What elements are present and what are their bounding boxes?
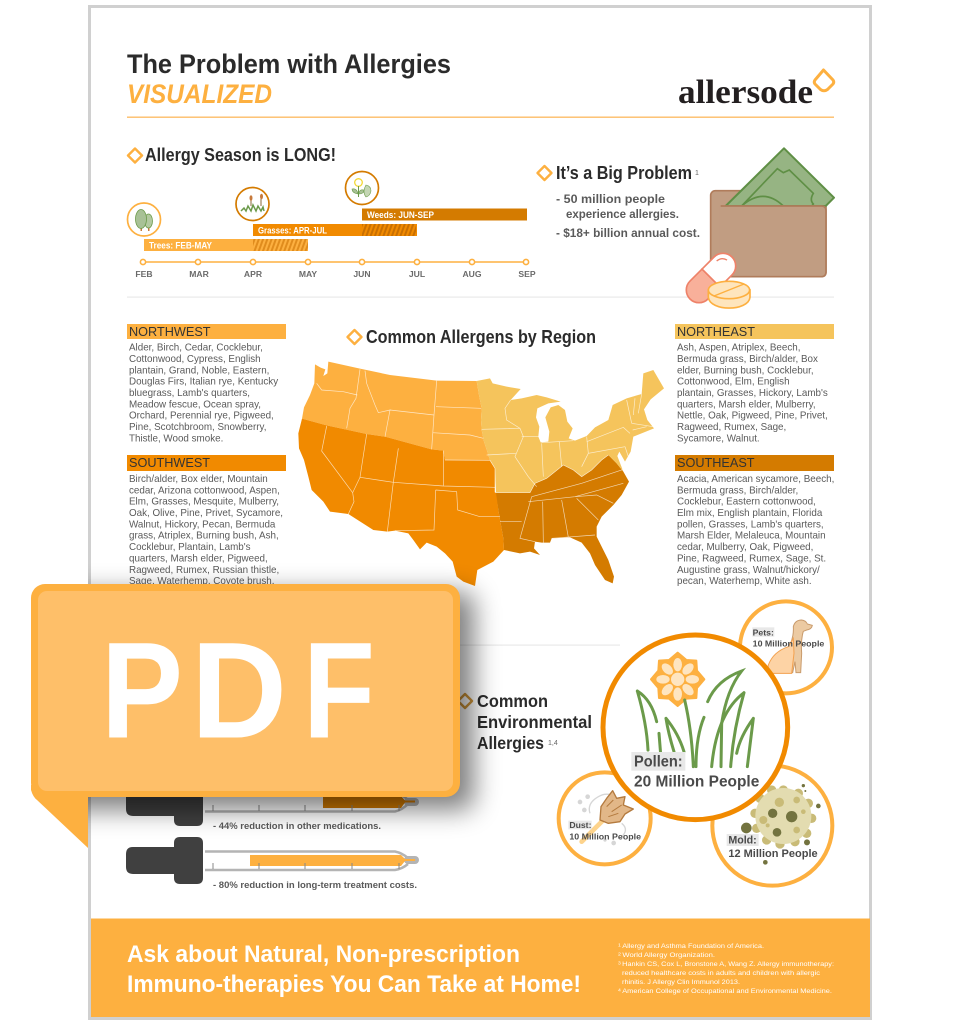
- text: problem stats: - $18+ billion annual cost.: [556, 227, 700, 240]
- state borders: [317, 369, 653, 543]
- heading: It's a Big Problem: 1: [695, 170, 699, 177]
- footer references: Hankin CS, Cox L, Bronstone A, Wang Z. Allergy immunotherapy:: [622, 961, 834, 968]
- dropper: other medications: [126, 778, 419, 832]
- badge tail: [31, 785, 88, 848]
- panel: southeast: pollen, Grasses, Lamb's quarters,: [677, 519, 824, 531]
- logo: allersode: allersode: [678, 74, 813, 111]
- footer references: 4: [618, 988, 622, 992]
- month axis: SEP: [518, 269, 536, 279]
- panel: southeast: Marsh Elder, Melaleuca, Mountain: [677, 530, 826, 542]
- panel: southwest: Sage, Waterhemp, Coyote brush,: [129, 576, 275, 587]
- footer references: [618, 942, 834, 995]
- footer references: reduced healthcare costs in adults and children with allergic: [622, 970, 821, 977]
- bar: grasses: Grasses: APR-JUL: [258, 226, 327, 236]
- bar: trees: Trees: FEB-MAY: [149, 240, 212, 250]
- badge label: D: [191, 614, 287, 768]
- heading: Common Allergens by Region: Common Allergens by Region: [366, 327, 596, 347]
- allergen circles: [559, 601, 832, 886]
- panel: southeast: Cocklebur, Eastern cottonwood,: [677, 496, 816, 508]
- panel: northeast: Ragweed, Rumex, Sage,: [677, 422, 786, 433]
- panel: northeast: Cottonwood, Elm, English: [677, 376, 790, 388]
- panel: northwest: Thistle, Wood smoke.: [129, 433, 223, 445]
- divider: [440, 644, 620, 646]
- circle: pets: [740, 601, 832, 693]
- circle: mold: Mold:: [728, 834, 757, 846]
- heading: Allergy Season is LONG: Allergy Season is LONG!: [145, 145, 336, 165]
- bar: weeds: [362, 208, 527, 220]
- footer call to action: Ask about Natural, Non-prescription: [127, 941, 520, 968]
- panel: northwest: Pine, Scotchbroom, Snowberry,: [129, 422, 266, 433]
- heading: Common Environmental Allergies: Common: [477, 691, 548, 711]
- heading: Common Environmental Allergies: Environmental: [477, 712, 592, 732]
- panel: northeast: plantain, Grasses, Hickory, Lamb's: [677, 388, 828, 399]
- panel: southeast: Augustine grass, Walnut/hickory/: [677, 565, 820, 576]
- panel: southeast: pecan, Waterhemp, White ash.: [677, 576, 812, 587]
- region: southwest: [298, 419, 504, 586]
- text: problem stats: - 50 million people: [556, 193, 666, 206]
- icon: grasses: [236, 188, 269, 220]
- icon: weeds: [346, 172, 378, 204]
- panel: southwest: Walnut, Hickory, Pecan, Bermuda: [129, 519, 276, 531]
- circle: pollen: Pollen:: [634, 754, 683, 771]
- month axis: FEB: [135, 269, 153, 279]
- footer band: [91, 918, 870, 1017]
- panel: northwest: Douglas Firs, Italian rye, Kentucky: [129, 376, 279, 388]
- heading: It's a Big Problem: It’s a Big Problem: [556, 163, 692, 183]
- panel: northwest: NORTHWEST: [129, 325, 211, 339]
- panel: northwest: Meadow fescue, Ocean spray,: [129, 399, 261, 411]
- panel: northwest: Alder, Birch, Cedar, Cocklebur,: [129, 342, 263, 354]
- heading: Common Environmental Allergies: [458, 691, 592, 753]
- panel: southeast: Pine, Ragweed, Rumex, Sage, St.: [677, 553, 826, 565]
- panel: northeast: Ash, Aspen, Atriplex, Beech,: [677, 342, 800, 354]
- panel: northeast: Bermuda grass, Birch/alder, Box: [677, 354, 818, 365]
- panel: southwest: [127, 455, 286, 587]
- PDF badge: [31, 584, 460, 848]
- panel: southeast: Bermuda grass, Birch/alder,: [677, 485, 798, 497]
- month axis: JUL: [409, 269, 425, 279]
- bar: weeds: Weeds: JUN-SEP: [367, 210, 434, 220]
- panel: southwest: Elm, Grasses, Mesquite, Mulberry,: [129, 496, 279, 508]
- badge label: [101, 614, 375, 768]
- icon: wallet with money and pills: [681, 148, 834, 308]
- badge label: F: [303, 614, 375, 768]
- panel: southwest: Ragweed, Rumex, Russian thistle,: [129, 565, 279, 576]
- header rule: [127, 116, 834, 118]
- panel: northwest: Cottonwood, Cypress, English: [129, 354, 261, 365]
- panel: southeast: Elm mix, English plantain, Florida: [677, 508, 823, 519]
- badge label: P: [101, 614, 183, 768]
- month axis: MAY: [299, 269, 317, 279]
- chart: allergy season timeline: [128, 172, 536, 279]
- icon: flower: [651, 653, 704, 706]
- title: The Problem with Allergies: [127, 49, 451, 79]
- region: northeast: [477, 370, 664, 493]
- footer references: 1: [618, 942, 622, 948]
- footer references: World Allergy Organization.: [622, 952, 715, 959]
- dropper: treatment costs: [126, 837, 419, 891]
- panel: southeast: Acacia, American sycamore, Beech,: [677, 474, 834, 485]
- panel: northwest: [127, 324, 286, 445]
- panel: southeast: [675, 455, 834, 587]
- circle: pets: 10 Million People: [753, 639, 825, 649]
- dropper: treatment costs: - 80% reduction in long-term treatment costs.: [213, 880, 417, 891]
- footer call to action: Immuno-therapies You Can Take at Home!: [127, 971, 581, 998]
- footer references: 3: [618, 960, 622, 966]
- panel: northeast: [675, 324, 834, 445]
- panel: northeast: quarters, Marsh elder, Mulberry,: [677, 399, 816, 411]
- panel: southwest: Oak, Olive, Pine, Privet, Sycamore,: [129, 508, 283, 519]
- month axis: AUG: [462, 269, 482, 279]
- month axis: APR: [244, 269, 263, 279]
- footer references: American College of Occupational and Environmental Medicine.: [622, 988, 832, 995]
- title: [127, 49, 451, 109]
- panel: northwest: Orchard, Perennial rye, Pigweed,: [129, 410, 274, 422]
- icon: trees: [128, 203, 160, 236]
- panel: southwest: quarters, Marsh elder, Pigweed,: [129, 553, 268, 565]
- region: southeast: [496, 455, 629, 583]
- title: VISUALIZED: [127, 79, 272, 109]
- panel: southeast: cedar, Mulberry, Oak, Pigweed,: [677, 542, 813, 553]
- heading: Common Environmental Allergies: Allergies: [477, 733, 544, 753]
- text: problem stats: experience allergies.: [566, 208, 679, 221]
- region: northwest: [302, 362, 490, 460]
- circle: dust: 10 Million People: [569, 831, 641, 841]
- map: United States by region: [298, 362, 664, 586]
- circle: pets: Pets:: [753, 627, 774, 637]
- panel: northwest: plantain, Grand, Noble, Eastern,: [129, 365, 269, 377]
- panel: northeast: elder, Burning bush, Cocklebur,: [677, 365, 814, 377]
- text: problem stats: [556, 193, 700, 240]
- panel: northeast: Nettle, Oak, Pigweed, Pine, Privet,: [677, 410, 828, 422]
- month axis: JUN: [353, 269, 371, 279]
- dropper: other medications: - 44% reduction in other medications.: [213, 821, 381, 832]
- footer call to action: [127, 941, 581, 998]
- bar: trees: [144, 239, 308, 251]
- circle: dust: Dust:: [569, 820, 592, 830]
- panel: southeast: SOUTHEAST: [677, 456, 755, 470]
- month axis: [135, 259, 536, 279]
- panel: southwest: SOUTHWEST: [129, 456, 210, 470]
- divider: [127, 296, 834, 298]
- panel: southwest: Cocklebur, Plantain, Lamb's: [129, 542, 251, 553]
- bar: grasses: [253, 224, 417, 236]
- footer references: Allergy and Asthma Foundation of America.: [622, 943, 764, 950]
- panel: southwest: Birch/alder, Box elder, Mountain: [129, 474, 268, 485]
- month axis: MAR: [189, 269, 210, 279]
- circle: pollen: 20 Million People: [634, 774, 760, 791]
- panel: southwest: grass, Atriplex, Burning bush, Ash,: [129, 530, 279, 542]
- panel: northwest: bluegrass, Lamb's quarters,: [129, 388, 250, 399]
- icon: grass: [637, 671, 753, 767]
- footer references: rhinitis. J Allergy Clin Immunol 2013.: [622, 979, 740, 986]
- panel: northeast: NORTHEAST: [677, 325, 755, 339]
- circle: dust: [559, 772, 651, 864]
- footer references: 2: [618, 952, 622, 956]
- circle: pollen: [603, 635, 788, 820]
- circle: mold: [712, 766, 832, 886]
- PDF badge shadow: [42, 592, 474, 810]
- panel: northeast: Sycamore, Walnut.: [677, 433, 760, 445]
- heading: Common Environmental Allergies: 1,4: [548, 740, 558, 747]
- panel: southwest: cedar, Arizona cottonwood, Aspen,: [129, 485, 280, 497]
- circle: mold: 12 Million People: [728, 848, 818, 860]
